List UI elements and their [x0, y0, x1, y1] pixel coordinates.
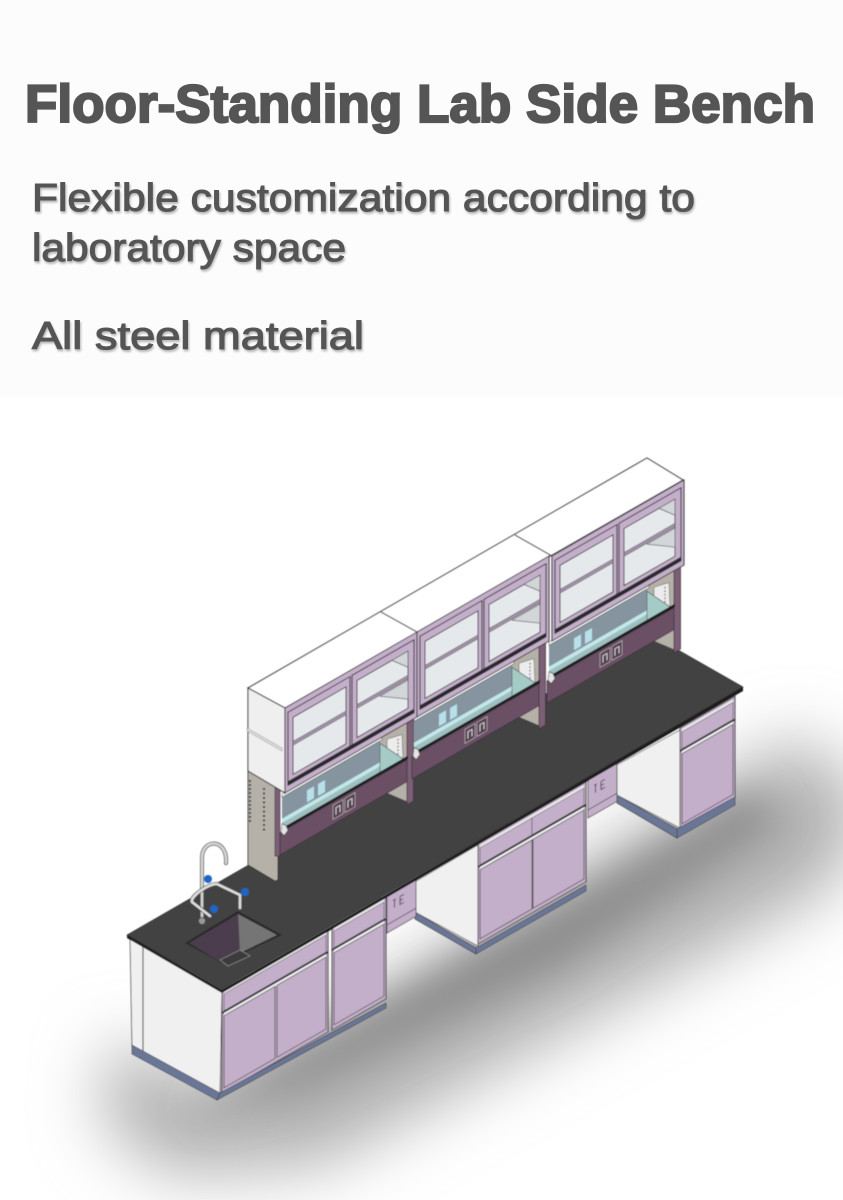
- reagent shelf bay 3: [547, 566, 680, 726]
- cabinet blue plinths: [217, 797, 735, 1100]
- subtitle text block: Flexible customization according to: [32, 177, 695, 220]
- upper glass cabinet 2: [417, 556, 549, 717]
- subtitle text block: laboratory space: [32, 227, 346, 270]
- kneehole white panels and base: [415, 730, 680, 954]
- title: Floor-Standing Lab Side Bench: [25, 75, 815, 134]
- subtitle text block: All steel material: [32, 315, 364, 358]
- side pillar: [248, 770, 280, 881]
- left end panel: [130, 938, 222, 1100]
- lower cabinet middle double door: [478, 782, 586, 944]
- reagent shelf bay 2: [412, 642, 546, 802]
- lower cabinet right single door: [680, 696, 735, 829]
- lab bench illustration: [127, 458, 743, 1100]
- lower cabinet single door left: [332, 896, 386, 1030]
- subtitle text block: [32, 177, 695, 358]
- upper cabinet side panel: [247, 688, 285, 793]
- countertop: [127, 634, 743, 993]
- sink: [185, 911, 282, 966]
- recess panels with TE handles: [387, 763, 617, 933]
- floor shadow: [100, 735, 843, 1175]
- upper cabinet top surface: [248, 458, 683, 708]
- header background panel: [0, 0, 843, 397]
- upper glass cabinet 3: [552, 480, 684, 641]
- upper glass cabinet 1: [285, 632, 417, 793]
- faucet: [192, 844, 249, 924]
- reagent shelf bay 1: [280, 718, 414, 878]
- lower cabinet with sink doors: [222, 929, 328, 1093]
